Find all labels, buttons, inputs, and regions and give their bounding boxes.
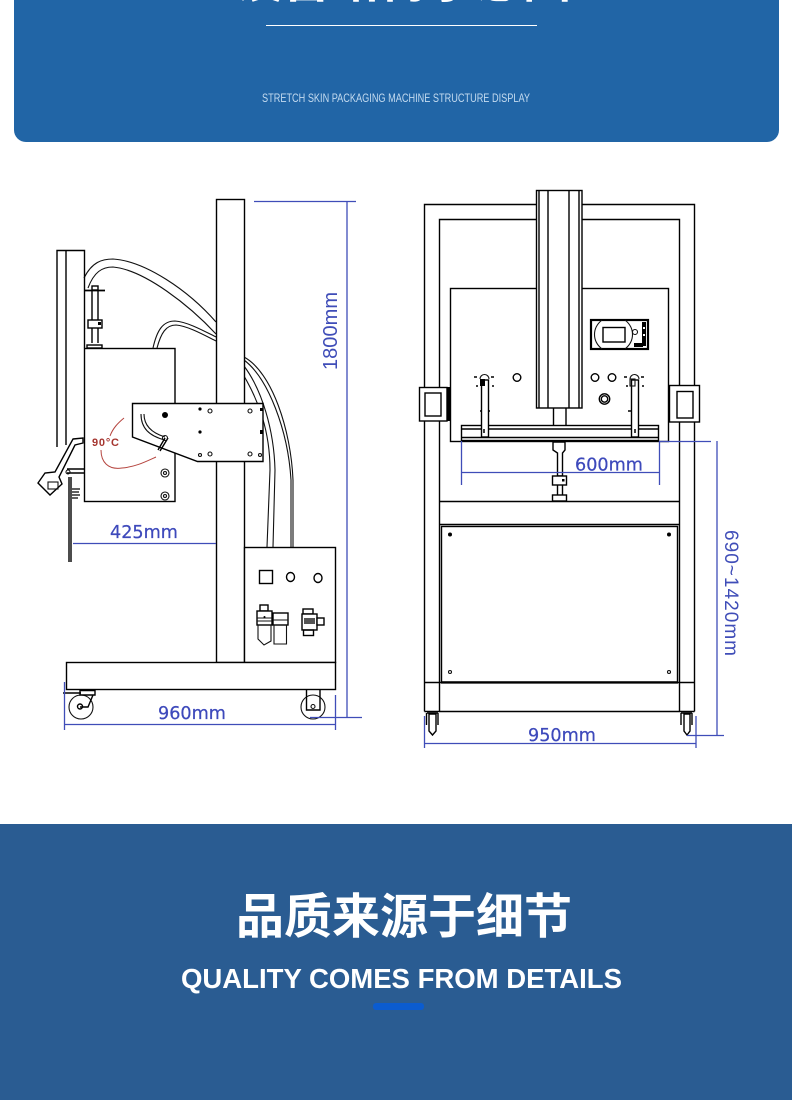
dimension 600mm [462, 441, 711, 485]
dimension 690~1420mm [687, 441, 741, 736]
side view: pressure regulator [302, 609, 324, 636]
side view: hoses [84, 259, 293, 547]
side view: temperature annotation [92, 418, 156, 468]
front view: control display [591, 320, 648, 349]
front view drawing [420, 190, 741, 748]
header banner [14, 0, 779, 142]
front view: buttons [513, 374, 616, 404]
footer heading: 品质来源于细节 [236, 891, 572, 944]
side view: hand lever [38, 438, 84, 562]
side view: lead screw [84, 286, 105, 348]
side view: air filter regulator [257, 605, 288, 645]
dimension 950mm: 950mm [528, 726, 596, 746]
side view drawing [38, 200, 362, 730]
side view: right caster [301, 690, 325, 719]
front view: center stem [552, 442, 566, 501]
dimension 1800mm [254, 202, 362, 718]
footer banner [0, 824, 792, 1100]
dimension 600mm: 600mm [575, 456, 643, 476]
side view: sliding plate [132, 404, 263, 462]
front view: right caster [681, 713, 692, 735]
dimension 425mm: 425mm [110, 523, 178, 543]
side view: left caster [63, 690, 95, 719]
front view: outer frame [424, 204, 694, 712]
front view: cylinder column [536, 190, 582, 426]
side view: base [66, 662, 336, 690]
front view: side handles [420, 386, 700, 422]
header subtitle: STRETCH SKIN PACKAGING MACHINE STRUCTURE DISPLAY [262, 91, 530, 105]
side view: heater box [84, 348, 175, 502]
front view: pressure bar [461, 426, 659, 442]
dimension 690~1420mm: 690~1420mm [720, 530, 741, 656]
side view: column [216, 200, 244, 662]
side view: temperature annotation: 90°C [92, 437, 119, 449]
dimension 960mm [64, 682, 336, 730]
footer subtitle: QUALITY COMES FROM DETAILS [181, 963, 622, 994]
dimension 1800mm: 1800mm [320, 292, 342, 370]
front view: rear panel [450, 288, 668, 442]
side view: rear post [57, 250, 84, 447]
side view: control box [244, 548, 336, 662]
accent bar [373, 1003, 424, 1010]
front view: left caster [426, 713, 438, 735]
front view: left arm [474, 374, 494, 437]
side view: box bolts [161, 469, 169, 500]
dimension 960mm: 960mm [158, 704, 226, 724]
front view: lower frame and panel [424, 502, 694, 712]
dimension 950mm [424, 716, 696, 748]
front view: right arm [624, 374, 644, 437]
